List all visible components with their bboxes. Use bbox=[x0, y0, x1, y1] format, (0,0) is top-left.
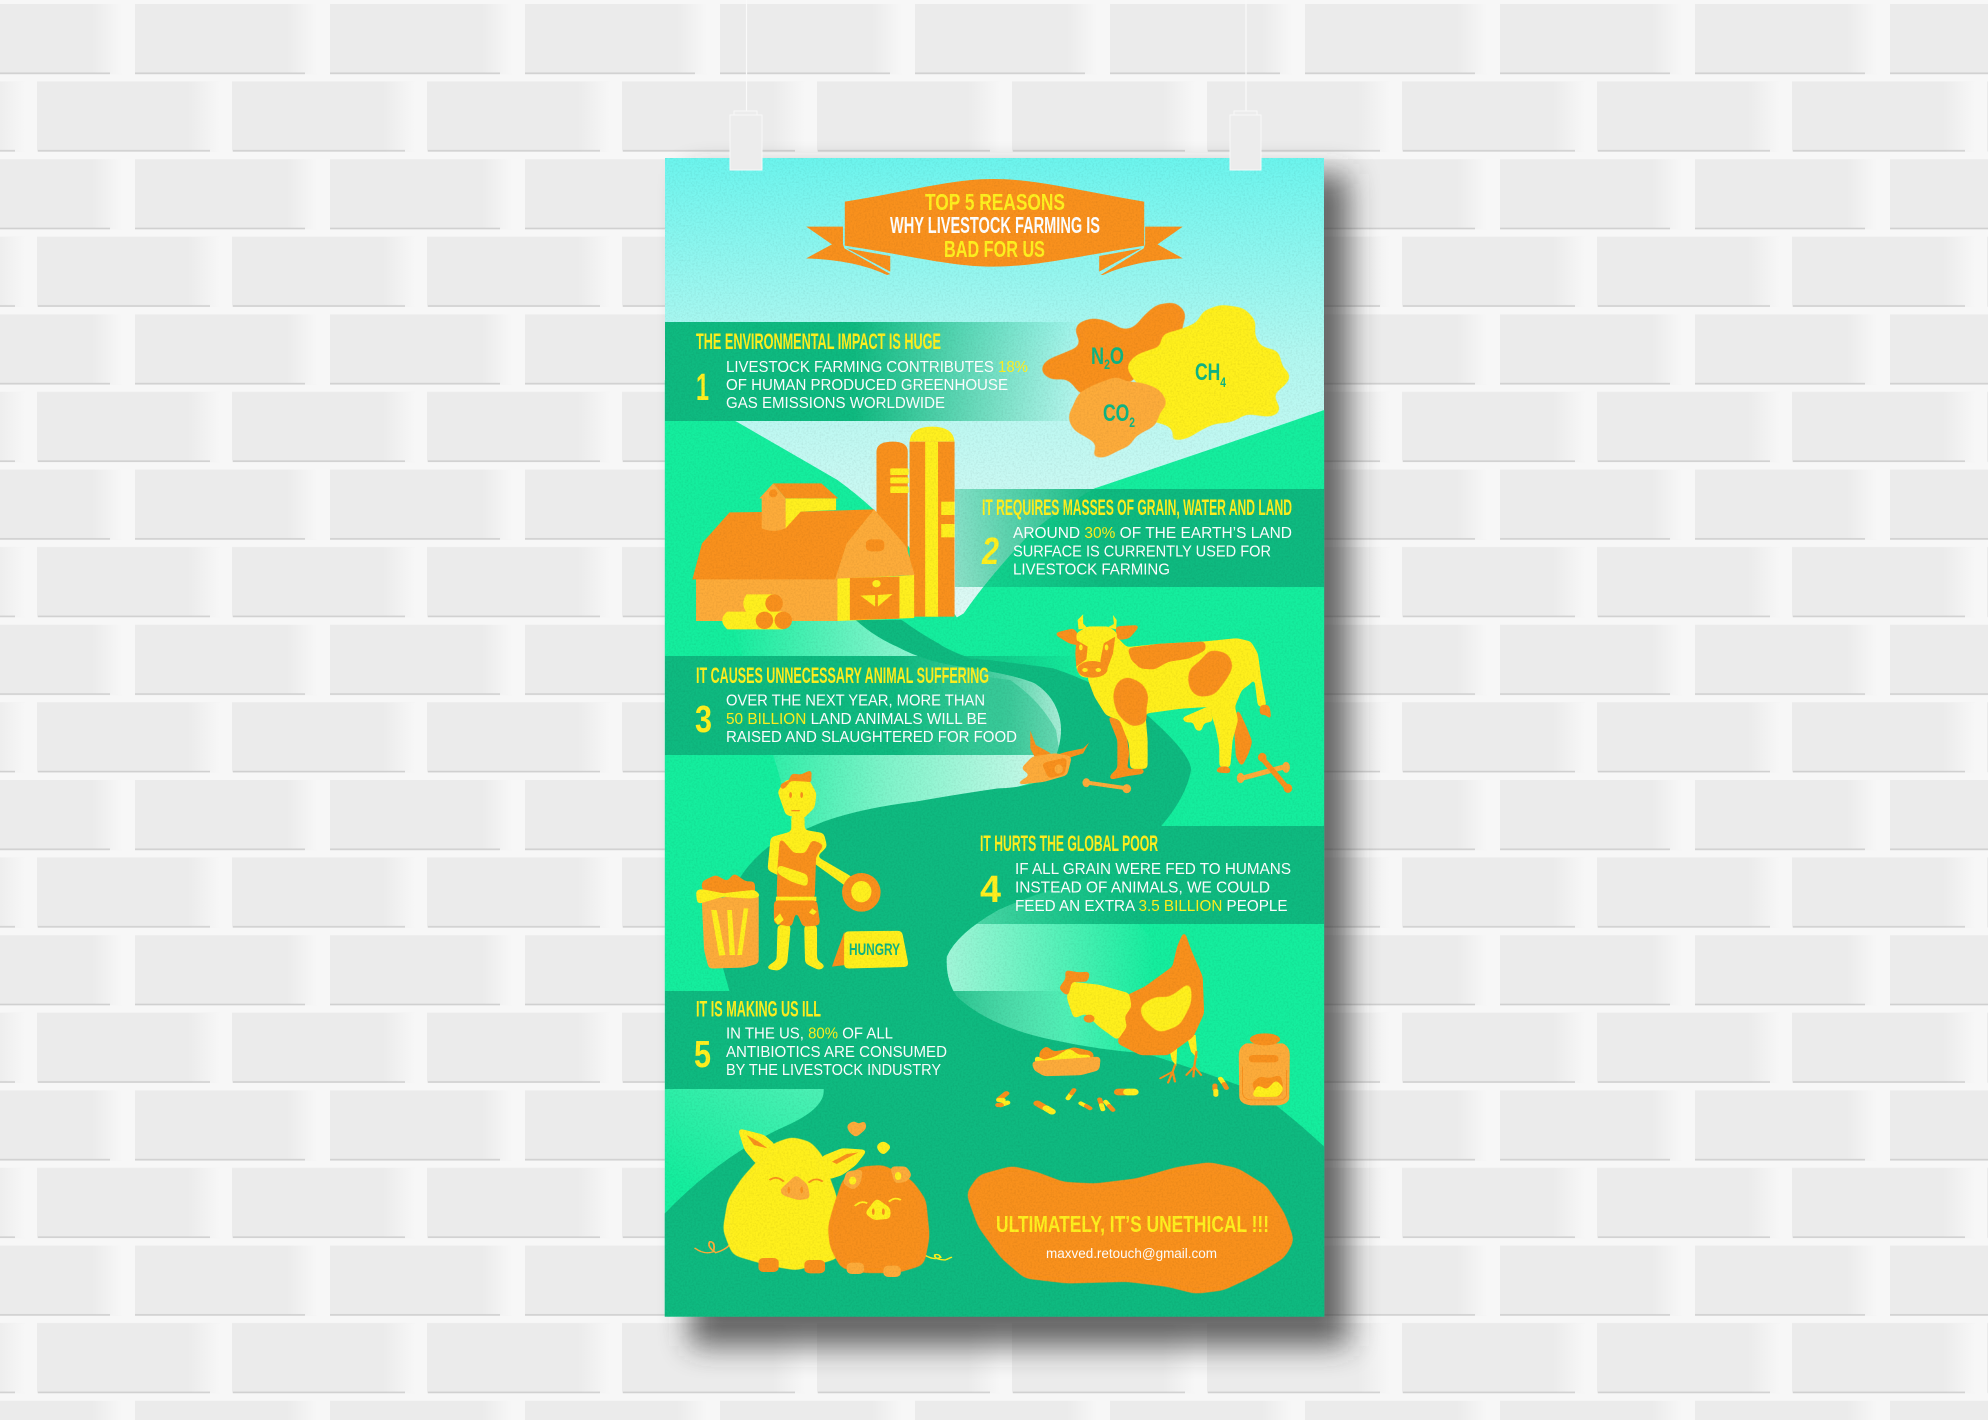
section 1 number: 1 bbox=[696, 367, 709, 409]
pill pair bbox=[1100, 1099, 1113, 1110]
label: N2O: N bbox=[1091, 343, 1108, 370]
chicken body bbox=[1118, 931, 1204, 1055]
light path right of the road bbox=[947, 877, 1191, 1063]
section 1 heading: THE ENVIRONMENTAL IMPACT IS HUGE bbox=[696, 329, 941, 354]
section 4 text bbox=[980, 831, 1291, 915]
bone on road bbox=[1083, 778, 1131, 793]
section 5 number: 5 bbox=[694, 1034, 711, 1076]
crossed bones bbox=[1237, 753, 1292, 793]
feed bowl bbox=[1032, 1046, 1101, 1076]
sign-off blob bbox=[966, 1163, 1294, 1293]
section 4 heading: IT HURTS THE GLOBAL POOR bbox=[980, 831, 1158, 856]
section 3 text bbox=[695, 663, 1017, 746]
orange pig ears bbox=[843, 1169, 863, 1190]
pill capsule bbox=[1209, 1085, 1221, 1095]
cloud: CH4 bbox=[1126, 305, 1292, 445]
section 3 body bbox=[726, 692, 1017, 746]
section 4 body: INSTEAD OF ANIMALS, WE COULD bbox=[1015, 880, 1270, 896]
section 5 body: ANTIBIOTICS ARE CONSUMED bbox=[726, 1044, 947, 1061]
cow ears bbox=[1053, 628, 1085, 647]
hand over belly bbox=[778, 865, 808, 887]
yellow pig feet bbox=[758, 1258, 779, 1272]
orange pig snout bbox=[865, 1198, 890, 1220]
scenery: hills and winding road bbox=[665, 380, 1324, 1317]
hungry sign bbox=[832, 931, 909, 968]
label: CH4: CH bbox=[1195, 359, 1230, 386]
title line 2: WHY LIVESTOCK FARMING IS bbox=[890, 212, 1100, 238]
section 3 heading: IT CAUSES UNNECESSARY ANIMAL SUFFERING bbox=[696, 663, 989, 688]
chicken legs and feet bbox=[1160, 1035, 1201, 1083]
cow rear legs bbox=[1107, 715, 1145, 780]
cow tail tuft bbox=[1260, 705, 1272, 722]
section 3 number: 3 bbox=[695, 699, 712, 741]
section 4 number: 4 bbox=[980, 869, 1001, 911]
section 4 body: IF ALL GRAIN WERE FED TO HUMANS bbox=[1015, 861, 1291, 878]
barn roof bbox=[692, 509, 874, 579]
orange pig bbox=[828, 1165, 929, 1277]
section 2 text bbox=[981, 495, 1292, 578]
cupola bbox=[759, 483, 838, 531]
ribbon tails bbox=[806, 227, 1183, 275]
barn gable bbox=[835, 509, 915, 579]
label: CO2: CO bbox=[1103, 400, 1139, 427]
cow bbox=[1053, 614, 1272, 780]
band 1 background bbox=[665, 322, 1085, 421]
hearts bbox=[847, 1120, 892, 1155]
pill jar bbox=[1239, 1033, 1290, 1105]
title line 1: TOP 5 REASONS bbox=[925, 189, 1065, 215]
section 4 body bbox=[1015, 861, 1291, 915]
section 2 number: 2 bbox=[981, 531, 999, 573]
label: N2O: O bbox=[1110, 343, 1124, 370]
pill capsule bbox=[1081, 1103, 1090, 1108]
green hills bbox=[665, 380, 1324, 1317]
label: N2O: 2 bbox=[1104, 356, 1110, 372]
hanging strings bbox=[746, 0, 1246, 112]
shirt bbox=[777, 837, 824, 898]
band 5 background bbox=[665, 991, 1070, 1089]
orange pig feet bbox=[847, 1263, 864, 1274]
band 4 background bbox=[955, 826, 1324, 924]
bottom section: pills, pigs and sign-off bbox=[695, 1079, 1294, 1293]
neck and arms bbox=[768, 815, 856, 887]
poster bbox=[665, 158, 1324, 1317]
section 3 body: RAISED AND SLAUGHTERED FOR FOOD bbox=[726, 729, 1017, 746]
face bbox=[789, 792, 803, 811]
section 5 body: IN THE US, 80% OF ALL bbox=[726, 1026, 893, 1042]
section 1 body: LIVESTOCK FARMING CONTRIBUTES 18% bbox=[726, 359, 1028, 376]
paper texture bbox=[665, 158, 1324, 1317]
head bbox=[778, 780, 816, 818]
orange pig eyes bbox=[855, 1199, 901, 1206]
skull and bones bbox=[1014, 731, 1292, 793]
yellow pig eyes bbox=[769, 1178, 823, 1183]
barn lower wall bbox=[696, 579, 838, 621]
trash can bbox=[696, 873, 762, 968]
left silo bbox=[876, 442, 909, 560]
title bbox=[890, 189, 1100, 262]
yellow pig ears bbox=[738, 1128, 775, 1165]
band 2 background bbox=[955, 489, 1324, 587]
legs bbox=[765, 925, 791, 971]
cow udder bbox=[1181, 706, 1213, 732]
section 2 body bbox=[1013, 525, 1292, 578]
section 5 heading: IT IS MAKING US ILL bbox=[696, 996, 821, 1022]
light patch lower left bbox=[665, 1088, 824, 1213]
chicken bbox=[1032, 931, 1290, 1105]
cloud: CO2 bbox=[1068, 377, 1168, 457]
pill capsule bbox=[1220, 1079, 1226, 1088]
cow spots bbox=[1128, 642, 1206, 669]
pill capsule bbox=[1118, 1082, 1134, 1102]
section 4 body: FEED AN EXTRA 3.5 BILLION PEOPLE bbox=[1015, 898, 1288, 915]
section 3 body: 50 BILLION LAND ANIMALS WILL BE bbox=[726, 711, 987, 728]
section 1 body: OF HUMAN PRODUCED GREENHOUSE bbox=[726, 377, 1008, 394]
poster sky bbox=[665, 158, 1324, 658]
yellow pig bbox=[723, 1128, 867, 1273]
jar outline bbox=[1242, 1067, 1287, 1100]
clips bbox=[730, 111, 1261, 170]
chicken wattle bbox=[1084, 1015, 1095, 1023]
ribbon centre bbox=[845, 179, 1144, 267]
poster drop shadow bbox=[690, 174, 1348, 1346]
pill capsule bbox=[1068, 1090, 1074, 1098]
section 1 body bbox=[726, 359, 1028, 412]
left clip bbox=[730, 111, 762, 170]
title line 3: BAD FOR US bbox=[944, 236, 1045, 262]
cow horns bbox=[1078, 614, 1088, 629]
email: maxved.retouch@gmail.com bbox=[1046, 1246, 1217, 1261]
label: CO2: 2 bbox=[1129, 414, 1135, 430]
shorts bbox=[774, 901, 820, 927]
section 5 body: BY THE LIVESTOCK INDUSTRY bbox=[726, 1062, 941, 1079]
section 5 text bbox=[694, 996, 947, 1079]
section 1 body: GAS EMISSIONS WORLDWIDE bbox=[726, 395, 945, 412]
chicken wing bbox=[1140, 978, 1191, 1033]
dark winding road bbox=[665, 620, 1324, 1317]
barn and silos bbox=[692, 427, 955, 629]
cow head bbox=[1076, 627, 1118, 678]
begging bowl bbox=[842, 873, 881, 912]
cow hooves bbox=[1214, 767, 1231, 773]
yellow pig snout bbox=[780, 1175, 810, 1200]
section 5 body bbox=[726, 1026, 947, 1079]
chicken comb bbox=[1059, 970, 1090, 997]
waistband bbox=[776, 897, 816, 901]
band 3 background bbox=[665, 656, 1085, 755]
hay bales bbox=[722, 594, 792, 629]
section 2 body: LIVESTOCK FARMING bbox=[1013, 562, 1170, 578]
conclusion text: ULTIMATELY, IT’S UNETHICAL !!! bbox=[996, 1211, 1269, 1237]
section 1 text bbox=[696, 329, 1028, 412]
hungry person bbox=[696, 769, 909, 971]
pill capsule bbox=[1037, 1103, 1052, 1112]
cow body bbox=[1088, 633, 1266, 769]
right clip bbox=[1230, 111, 1261, 170]
barn door bbox=[837, 575, 914, 621]
right silo bbox=[910, 427, 955, 617]
yellow pig body bbox=[723, 1137, 840, 1270]
skull bbox=[1014, 731, 1089, 785]
label: CH4: 4 bbox=[1220, 374, 1226, 390]
hair bbox=[779, 769, 816, 792]
scattered pills bbox=[998, 1079, 1226, 1112]
light path left of the road bbox=[732, 620, 1061, 840]
chicken head and neck bbox=[1067, 982, 1131, 1040]
section 3 body: OVER THE NEXT YEAR, MORE THAN bbox=[726, 692, 985, 710]
orange pig body bbox=[828, 1165, 929, 1273]
section 2 body: AROUND 30% OF THE EARTH’S LAND bbox=[1013, 525, 1292, 542]
banner: title ribbon bbox=[806, 179, 1183, 275]
person figure bbox=[765, 769, 856, 971]
section 2 heading: IT REQUIRES MASSES OF GRAIN, WATER AND LAND bbox=[982, 495, 1292, 520]
pill cluster bbox=[998, 1093, 1007, 1105]
pig tails bbox=[695, 1242, 951, 1260]
cloud: N2O bbox=[1040, 303, 1189, 395]
section 2 body: SURFACE IS CURRENTLY USED FOR bbox=[1013, 544, 1271, 560]
hungry sign text: HUNGRY bbox=[849, 940, 900, 959]
gas clouds bbox=[1040, 303, 1292, 457]
